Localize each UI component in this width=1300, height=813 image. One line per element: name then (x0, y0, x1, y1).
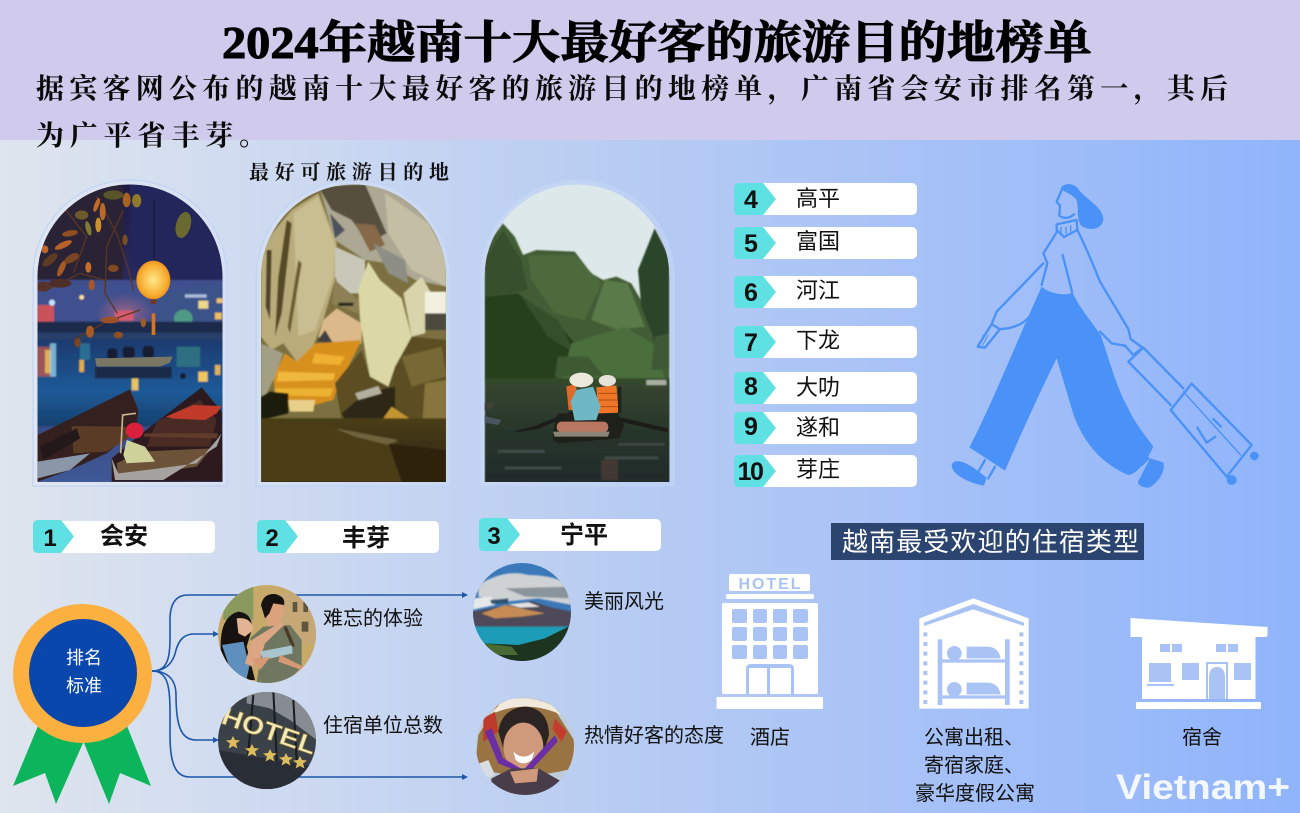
map (260, 645, 293, 660)
centre pale rock (335, 247, 365, 293)
icon: criteria medal (13, 604, 152, 804)
ceiling and upper rocks (318, 183, 446, 287)
rank 7 (734, 326, 917, 358)
icon: hotel building: HOTEL (738, 576, 801, 593)
photo: hotel sign (217, 692, 320, 790)
label: beautiful scenery: 美丽风光 (584, 590, 664, 613)
rank 5 (734, 227, 917, 259)
rank 4: 高平 (796, 186, 840, 211)
rank 9: 遂和 (796, 415, 840, 440)
rank 9: 9 (744, 413, 758, 441)
illustration: woman walking with suitcase (952, 184, 1259, 488)
right boat (112, 387, 223, 482)
rank 10: 10 (738, 458, 763, 486)
rank 8: 大叻 (796, 375, 840, 400)
rank 6 (734, 276, 917, 308)
ranking badge 1: 1 (43, 525, 57, 552)
photo: Ninh Binh boat and mountains (485, 183, 670, 483)
rank 7: 下龙 (796, 328, 840, 353)
title: 2024年越南十大最好客的旅游目的地榜单 (222, 18, 1092, 68)
rank 5: 5 (744, 230, 758, 258)
intro text (36, 72, 1228, 152)
ranking badge 3: 宁平 (560, 522, 608, 549)
label: dormitory: 宿舍 (1182, 726, 1222, 749)
label: apartments and homestays: 公寓出租、 (924, 726, 1024, 749)
icon: hotel building (716, 574, 823, 709)
rank 6: 6 (744, 279, 758, 307)
icon: criteria medal: 排名 (66, 648, 102, 668)
rank 4 (734, 183, 917, 215)
rank 8 (734, 372, 917, 404)
logo: Vietnam+: Vietnam+ (1116, 768, 1290, 807)
photo: smiling woman in conical hat (475, 697, 575, 797)
list: destinations 4 to 10 (734, 183, 917, 487)
sweater and arms (1042, 232, 1057, 285)
rank 10 (734, 455, 917, 487)
intro text: 为广平省丰芽。 (36, 120, 267, 152)
photo: travellers with map (217, 583, 317, 683)
panel: top three destination photos (33, 180, 674, 486)
ranking badge 2: 2 (265, 525, 279, 552)
ankles (978, 460, 995, 478)
label: total accommodation units: 住宿单位总数 (323, 714, 443, 737)
icon: hostel with bunk beds (919, 598, 1029, 709)
face and collar (1057, 190, 1074, 218)
curtain (261, 193, 337, 362)
label: apartments and homestays: 寄宿家庭、 (924, 754, 1024, 777)
ranking badge 3: 3 (487, 523, 501, 550)
photo: hotel sign: HOTEL (218, 702, 320, 761)
icon: criteria medal: 标准 (66, 676, 102, 696)
photo: scenic lake (472, 562, 572, 662)
floor (261, 418, 446, 483)
trousers (969, 287, 1153, 475)
central column and right-side rocks (358, 262, 412, 387)
ranking badge 1: 会安 (100, 523, 148, 550)
ranking badge 3 (479, 518, 661, 551)
heading: popular accommodation types: 越南最受欢迎的住宿类型 (842, 527, 1139, 557)
suitcase (1128, 348, 1183, 405)
branches and leaves (47, 197, 140, 340)
rank 4: 4 (744, 186, 758, 214)
label: apartments and homestays: 豪华度假公寓 (915, 782, 1035, 805)
ranking badge 2 (257, 520, 439, 553)
ranking badge 1 (33, 520, 215, 553)
label: memorable experience: 难忘的体验 (323, 607, 423, 630)
man (250, 625, 302, 683)
photo: Phong Nha cave (261, 183, 446, 483)
golden steps (273, 340, 362, 410)
rank 6: 河江 (796, 278, 840, 303)
header band (0, 0, 1300, 140)
arch frames (33, 180, 674, 486)
icon: dormitory house (1130, 618, 1268, 709)
label: apartments and homestays (915, 726, 1035, 805)
label: friendly attitude: 热情好客的态度 (584, 724, 724, 747)
shoes (952, 461, 987, 486)
rank 5: 富国 (796, 229, 840, 254)
rank 8: 8 (744, 373, 758, 401)
photo: Hoi An lantern night (36, 183, 223, 483)
intro text: 据宾客网公布的越南十大最好客的旅游目的地榜单，广南省会安市排名第一，其后 (36, 72, 1228, 105)
rank 9 (734, 412, 917, 444)
ranking badge 2: 丰芽 (342, 525, 390, 552)
left boat (38, 389, 138, 482)
woman (221, 612, 255, 680)
rank 7: 7 (744, 329, 758, 357)
subheading: top destinations: 最好可旅游目的地 (249, 161, 449, 184)
hair (1061, 184, 1103, 229)
label: hotel: 酒店 (750, 726, 790, 749)
rank 10: 芽庄 (796, 457, 840, 482)
connector arrows (152, 592, 468, 780)
